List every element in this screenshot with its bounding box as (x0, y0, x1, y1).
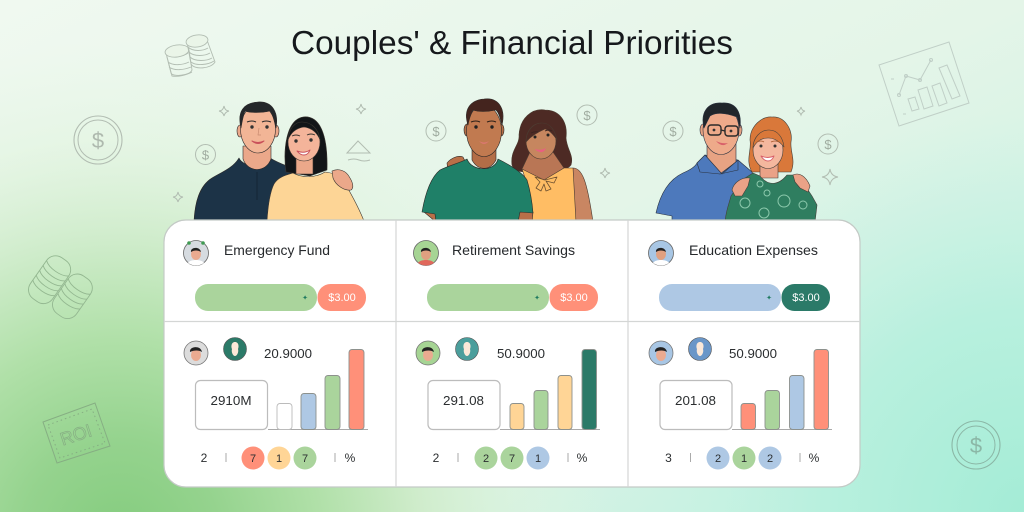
value box (660, 380, 732, 430)
legend row: 7 (509, 453, 515, 465)
column 1 header: Emergency Fund: $3.00 (328, 292, 356, 304)
legend row: 2 (767, 453, 773, 465)
bar chart (732, 350, 832, 430)
column 3 chart block (649, 338, 832, 470)
couple 1 (194, 102, 364, 221)
value box (196, 380, 268, 430)
legend row: 2 (715, 453, 721, 465)
value: 50.9000 (497, 347, 545, 361)
decorative sparkles and symbols (173, 104, 838, 202)
man 1 (194, 102, 300, 221)
progress bar (659, 284, 781, 311)
value: 20.9000 (264, 347, 312, 361)
legend row: 1 (741, 453, 747, 465)
avatar (648, 240, 674, 266)
heading: Retirement Savings (452, 242, 575, 258)
title: Couples' & Financial Priorities (291, 24, 733, 61)
column 3 header: Education Expenses: $3.00 (792, 292, 820, 304)
avatar (184, 240, 208, 266)
avatars (184, 338, 246, 365)
man 2 (422, 99, 533, 222)
legend row: 2 (433, 451, 440, 465)
icon: small dollar coin left: $ (202, 148, 210, 162)
woman 1 (267, 117, 364, 221)
legend row: % (577, 451, 588, 465)
couple 2 (422, 99, 593, 222)
value pill (550, 284, 598, 311)
column 1 chart block: 2910M (210, 394, 252, 408)
couple 3 (656, 103, 817, 222)
avatars (416, 338, 478, 365)
column 2 header: Retirement Savings: $3.00 (560, 292, 588, 304)
heading: Education Expenses (689, 242, 818, 258)
value: 50.9000 (729, 347, 777, 361)
legend row: % (345, 451, 356, 465)
icon: chart sketch top right (879, 42, 969, 126)
column 3 chart block: 201.08 (675, 394, 716, 408)
value box (428, 380, 500, 430)
icon: large dollar coin left: $ (92, 128, 104, 153)
heading: Emergency Fund (224, 242, 330, 258)
legend row (433, 446, 588, 470)
couples illustrations (194, 99, 817, 222)
column 1 header: Emergency Fund (184, 240, 366, 311)
legend row: 1 (276, 453, 282, 465)
column 3 header: Education Expenses (648, 240, 830, 311)
woman 2 (512, 110, 593, 222)
icon: coin stacks lower left (24, 251, 97, 323)
value pill (782, 284, 830, 311)
icons: dollar coins around couples (426, 105, 838, 154)
icon: ROI certificate (43, 403, 110, 463)
column 2 header: Retirement Savings (414, 240, 598, 311)
icons: dollar coins around couples: $ (669, 124, 677, 139)
icon: ROI certificate: ROI (58, 421, 94, 449)
icon: dollar coin bottom right: $ (970, 433, 982, 458)
legend row: % (809, 451, 820, 465)
panel: comparison card (164, 220, 860, 487)
icon: coin stacks top left (164, 34, 215, 76)
column 2 header: Retirement Savings: ✦ (534, 294, 540, 302)
column 1 header: Emergency Fund: ✦ (302, 294, 308, 302)
legend row: 2 (201, 451, 208, 465)
progress bar (195, 284, 317, 311)
icons: dollar coins around couples: $ (824, 137, 832, 152)
progress bar (427, 284, 549, 311)
icon: small dollar coin left (196, 144, 216, 164)
avatars (649, 338, 712, 365)
column 2 chart block: 291.08 (443, 394, 484, 408)
woman 3 (725, 117, 817, 222)
man 3 (656, 102, 753, 220)
legend row: 7 (250, 453, 256, 465)
avatar (414, 240, 438, 266)
bar chart (268, 350, 368, 430)
legend row (665, 446, 820, 470)
legend row (201, 446, 356, 470)
legend row: 2 (483, 453, 489, 465)
column 1 chart block (184, 338, 368, 470)
column 2 chart block (416, 338, 600, 470)
icons: dollar coins around couples: $ (432, 124, 440, 139)
legend row: 1 (535, 453, 541, 465)
icon: large dollar coin left (74, 116, 122, 164)
legend row: 7 (302, 453, 308, 465)
icon: dollar coin bottom right (952, 421, 1000, 469)
column 3 header: Education Expenses: ✦ (766, 294, 772, 302)
value pill (318, 284, 366, 311)
icons: dollar coins around couples: $ (583, 108, 591, 123)
bar chart (500, 350, 600, 430)
legend row: 3 (665, 451, 672, 465)
